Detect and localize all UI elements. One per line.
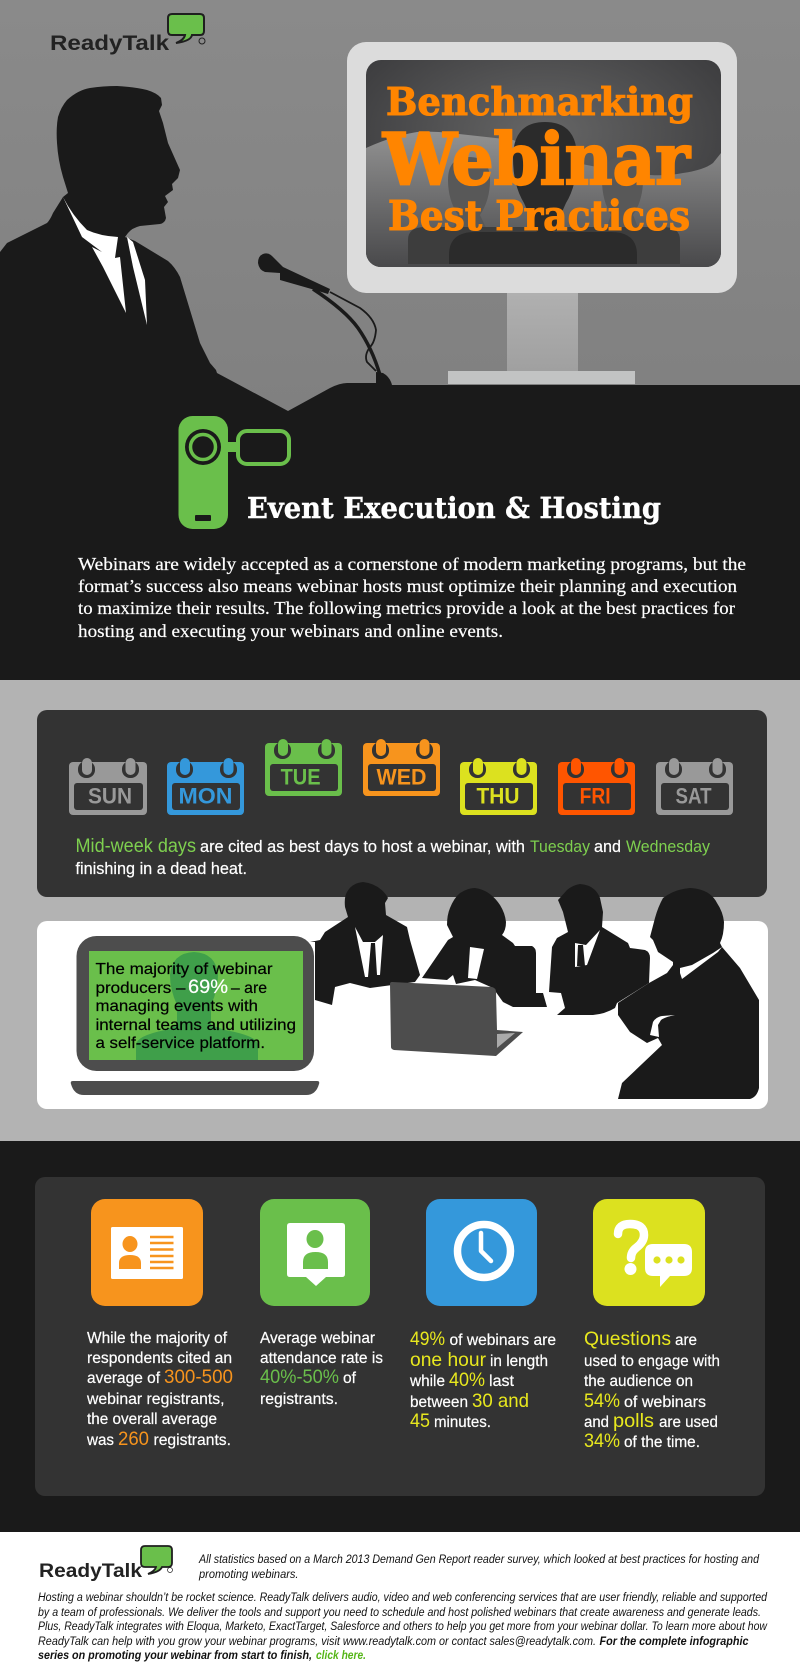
stat text: engagement: the audience on bbox=[584, 1373, 693, 1390]
intro text: to maximize their results. The following metrics provide a look at the best practices for bbox=[78, 598, 735, 618]
silhouette: man 3 foreground bbox=[618, 888, 759, 1099]
stat text: 69%: internal teams and utilizing bbox=[96, 1017, 296, 1034]
footer text: about ReadyTalk: ReadyTalk can help with you grow your webinar programs, visit www.readytalk.com or contact sales@readytalk.com. bbox=[38, 1636, 596, 1648]
monitor stand bbox=[507, 293, 578, 371]
stat text: engagement: 54% bbox=[584, 1390, 620, 1412]
icon: open laptop on table bbox=[390, 982, 523, 1056]
shirt: presenter collar bbox=[63, 197, 126, 313]
caption: mid-week days: finishing in a dead heat. bbox=[76, 860, 247, 878]
calendar: Wednesday: WED bbox=[376, 764, 426, 790]
icon: attendee speech bubble bbox=[260, 1199, 370, 1306]
stat text: engagement: of the time. bbox=[624, 1434, 700, 1451]
stat text: length bbox=[409, 1328, 556, 1432]
calendar: Thursday: THU bbox=[476, 784, 520, 808]
heading: Event Execution & Hosting: Event Execution & Hosting bbox=[247, 491, 661, 525]
dark stats background bbox=[0, 1141, 800, 1532]
header background bbox=[0, 0, 800, 415]
stat text: registrants: While the majority of bbox=[87, 1330, 228, 1347]
silhouette: presenter bbox=[0, 86, 217, 373]
monitor screen bbox=[366, 60, 721, 267]
stat text: engagement: used to engage with bbox=[584, 1353, 720, 1370]
logo: ReadyTalk footer: ReadyTalk bbox=[39, 1560, 142, 1582]
stat text: registrants: the overall average bbox=[87, 1411, 217, 1428]
silhouette: woman bbox=[422, 888, 547, 1007]
stat text: length: while bbox=[409, 1373, 445, 1390]
footer text: about ReadyTalk: by a team of professionals. We deliver the tools and support you need to schedule and host polished webinars that create awareness and generate leads. bbox=[38, 1607, 761, 1619]
stat text: length: between bbox=[410, 1394, 468, 1411]
calendar: Tuesday bbox=[265, 739, 342, 796]
panel: stats bbox=[35, 1177, 765, 1496]
stat text: 69%: a self-service platform. bbox=[96, 1035, 265, 1052]
laptop keyboard base bbox=[71, 1081, 319, 1095]
caption: mid-week days bbox=[76, 836, 711, 878]
calendar: Tuesday: TUE bbox=[281, 764, 321, 790]
stat text: engagement: Questions bbox=[584, 1328, 671, 1350]
calendar: Sunday: SUN bbox=[88, 784, 132, 808]
calendar: Saturday: SAT bbox=[676, 784, 712, 808]
stat text: 69%: 69% bbox=[188, 976, 228, 998]
icon: registration card bbox=[91, 1199, 203, 1306]
stat text: 69%: managing events with bbox=[96, 998, 258, 1015]
silhouette: man 2 bbox=[549, 884, 650, 1015]
stat text: length: minutes. bbox=[434, 1414, 491, 1431]
title: Benchmarking bbox=[386, 79, 693, 124]
intro text: hosting and executing your webinars and online events. bbox=[78, 621, 503, 641]
stat text: engagement: polls bbox=[613, 1410, 654, 1432]
calendar: Saturday bbox=[656, 758, 733, 815]
icon: video camera bbox=[178, 416, 289, 529]
panel: meeting table bbox=[37, 882, 768, 1109]
caption: mid-week days: are cited as best days to host a webinar, with bbox=[200, 838, 525, 856]
stat text: 69%: – are bbox=[231, 980, 267, 997]
stat text: registrants: 260 bbox=[118, 1428, 149, 1450]
stat text: engagement: of webinars bbox=[624, 1394, 706, 1411]
stat text: length: last bbox=[489, 1373, 515, 1390]
calendar: Monday: MON bbox=[178, 784, 232, 808]
footer background bbox=[0, 1532, 800, 1679]
footer text: about ReadyTalk: click here. bbox=[316, 1650, 366, 1662]
footer text: about ReadyTalk: series on promoting your webinar from start to finish, bbox=[38, 1650, 312, 1662]
monitor frame bbox=[347, 42, 737, 293]
calendar: Monday bbox=[167, 758, 244, 815]
title: Best Practices bbox=[388, 192, 690, 240]
stat text: registrants: registrants. bbox=[154, 1432, 231, 1449]
caption: mid-week days: Tuesday bbox=[530, 838, 591, 856]
calendar: Wednesday bbox=[363, 739, 440, 796]
icon: clock bbox=[426, 1199, 537, 1306]
title: Webinar bbox=[382, 117, 691, 201]
intro text: Webinars are widely accepted as a cornerstone of modern marketing programs, but the bbox=[78, 554, 746, 574]
panel: days of week bbox=[37, 710, 767, 897]
stat text: attendance: Average webinar bbox=[260, 1330, 375, 1347]
intro text bbox=[78, 554, 746, 641]
stat text: engagement: 34% bbox=[584, 1430, 620, 1452]
footer note: survey source: promoting webinars. bbox=[198, 1569, 298, 1581]
stat text: length: 30 and bbox=[472, 1390, 529, 1412]
stat text: registrants: respondents cited an bbox=[87, 1350, 232, 1367]
stat text: length: 49% bbox=[410, 1328, 445, 1350]
stat text: attendance: registrants. bbox=[260, 1391, 338, 1408]
logo: ReadyTalk header bbox=[50, 14, 205, 55]
logo: ReadyTalk header: ReadyTalk bbox=[50, 32, 169, 55]
stat text: length: of webinars are bbox=[450, 1332, 556, 1349]
stat text: length: in length bbox=[490, 1353, 548, 1370]
stat text: engagement: and bbox=[584, 1414, 609, 1431]
stat text: 69%: The majority of webinar bbox=[96, 961, 273, 978]
laptop: callout bbox=[71, 936, 319, 1095]
stat text: engagement: are bbox=[675, 1332, 697, 1349]
icon: question and chat bubble bbox=[593, 1199, 705, 1306]
stat text: 69% bbox=[96, 961, 296, 1052]
monitor bbox=[347, 42, 737, 384]
footer text: about ReadyTalk: For the complete infographic bbox=[600, 1636, 749, 1648]
monitor base bbox=[448, 371, 635, 384]
stat text: length: one hour bbox=[410, 1349, 486, 1371]
caption: mid-week days: Mid-week days bbox=[76, 836, 196, 857]
calendar: Friday bbox=[558, 758, 635, 815]
calendar: Friday: FRI bbox=[580, 784, 611, 808]
stat text: length: 45 bbox=[410, 1410, 430, 1432]
calendar: Sunday bbox=[69, 758, 147, 815]
stat text: registrants: 300-500 bbox=[164, 1366, 233, 1388]
stat text: attendance bbox=[260, 1330, 383, 1408]
stat text: attendance: 40%-50% bbox=[260, 1366, 339, 1388]
stat text: engagement bbox=[584, 1328, 720, 1452]
stat text: registrants bbox=[86, 1330, 233, 1450]
stat text: attendance: attendance rate is bbox=[260, 1350, 383, 1367]
footer text: about ReadyTalk bbox=[38, 1592, 768, 1662]
footer note: survey source: All statistics based on a March 2013 Demand Gen Report reader survey, which looked at best practices for hosting and bbox=[198, 1554, 760, 1566]
stat text: 69%: producers – bbox=[96, 980, 186, 997]
stat text: length: 40% bbox=[449, 1369, 485, 1391]
caption: mid-week days: Wednesday bbox=[626, 838, 711, 856]
intro text: format’s success also means webinar hosts must optimize their planning and execution bbox=[78, 576, 737, 596]
gray band background bbox=[0, 680, 800, 1141]
stat text: engagement: are used bbox=[659, 1414, 718, 1431]
stat text: registrants: average of bbox=[87, 1370, 161, 1387]
footer note: survey source bbox=[198, 1554, 760, 1581]
caption: mid-week days: and bbox=[594, 838, 621, 856]
stat text: attendance: of bbox=[343, 1370, 357, 1387]
silhouette: man 1 bbox=[310, 882, 420, 1005]
logo: ReadyTalk footer bbox=[39, 1546, 172, 1582]
stat text: registrants: was bbox=[86, 1432, 114, 1449]
icon: microphone bbox=[258, 253, 392, 385]
calendar: Thursday bbox=[460, 758, 537, 815]
stat text: registrants: webinar registrants, bbox=[86, 1391, 224, 1408]
title bbox=[382, 79, 693, 240]
dark section background bbox=[0, 373, 800, 680]
